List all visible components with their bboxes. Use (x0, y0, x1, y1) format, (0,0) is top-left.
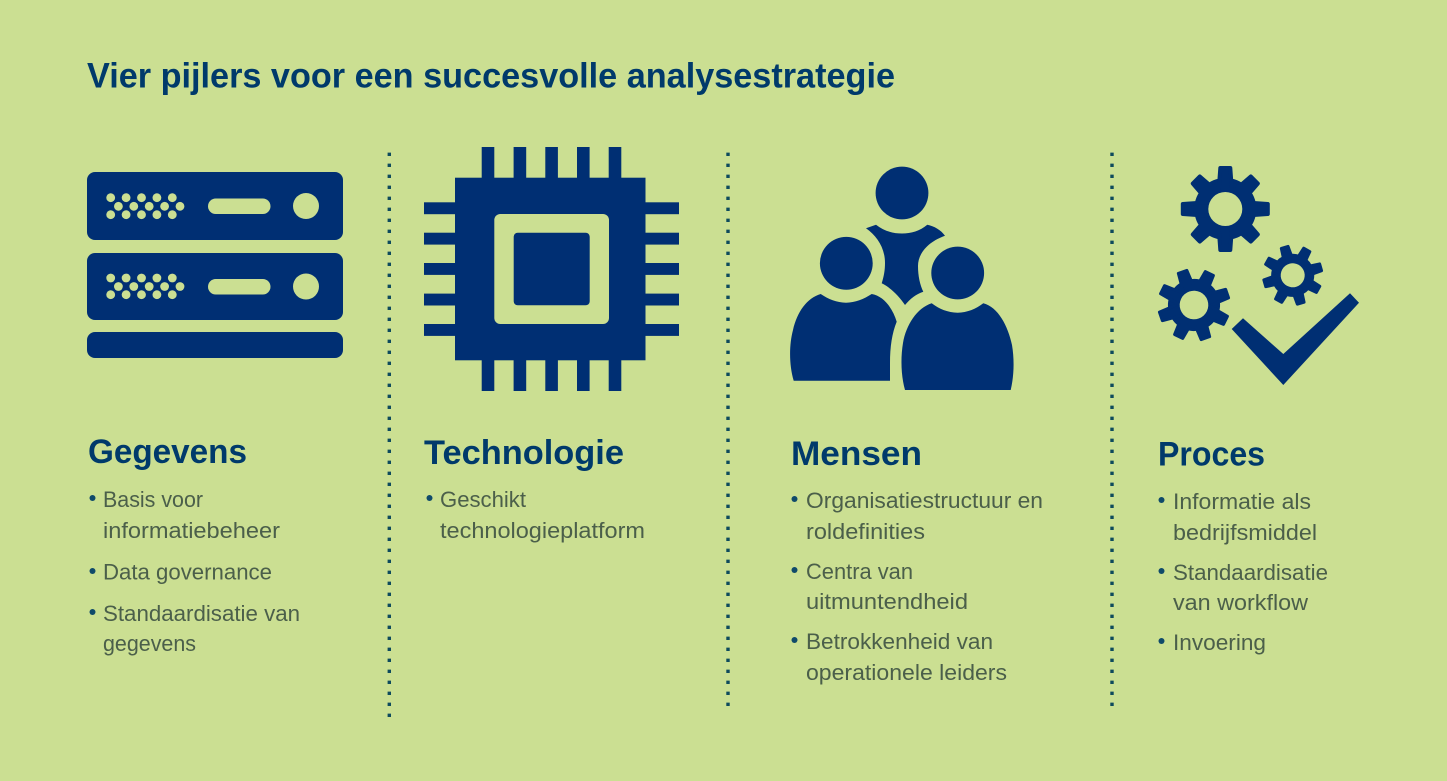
icon: server rack (87, 172, 343, 358)
bullet list: Mensen: uitmuntendheid (806, 589, 968, 614)
bullet list: Mensen: operationele leiders (806, 660, 1007, 685)
bullet list: Technologie: Geschikt (440, 487, 527, 512)
panel: Mensen (790, 167, 1043, 685)
panel: Technologie (424, 147, 679, 543)
bullet list: Technologie: technologieplatform (440, 518, 645, 543)
panel: Gegevens (87, 172, 343, 656)
bullet list: Proces: bedrijfsmiddel (1173, 520, 1317, 545)
title: Vier pijlers voor een succesvolle analysestrategie (87, 56, 895, 96)
icon: microchip (424, 147, 679, 391)
bullet list: Proces: Informatie als (1173, 489, 1311, 514)
bullet list: Gegevens: Basis voor (103, 487, 203, 512)
heading: Proces: Proces (1158, 436, 1265, 474)
heading: Technologie: Technologie (424, 434, 624, 472)
panel: Proces (1150, 168, 1359, 655)
icon: group of people (790, 167, 1014, 390)
divider: column 1 and 2 (388, 153, 391, 717)
divider: column 3 and 4 (1110, 153, 1114, 706)
heading: Gegevens: Gegevens (88, 433, 247, 471)
bullet list: Gegevens: Standaardisatie van (103, 601, 300, 626)
icon: gears and check mark (1150, 168, 1359, 385)
bullet list: Mensen: roldefinities (806, 519, 925, 544)
bullet list: Proces: Invoering (1173, 630, 1266, 655)
bullet list: Proces (1158, 489, 1328, 655)
heading: Mensen: Mensen (791, 435, 922, 473)
bullet list: Proces: van workflow (1173, 590, 1309, 615)
divider: column 2 and 3 (726, 153, 730, 706)
bullet list: Proces: Standaardisatie (1173, 560, 1328, 585)
bullet list: Gegevens: informatiebeheer (103, 518, 281, 543)
bullet list: Gegevens (90, 487, 300, 656)
bullet list: Mensen: Organisatiestructuur en (806, 488, 1043, 513)
bullet list: Mensen: Betrokkenheid van (806, 629, 993, 654)
bullet list: Mensen: Centra van (806, 559, 913, 584)
bullet list: Technologie (426, 487, 645, 543)
bullet list: Mensen (792, 488, 1043, 685)
bullet list: Gegevens: Data governance (103, 560, 272, 584)
bullet list: Gegevens: gegevens (103, 631, 196, 656)
